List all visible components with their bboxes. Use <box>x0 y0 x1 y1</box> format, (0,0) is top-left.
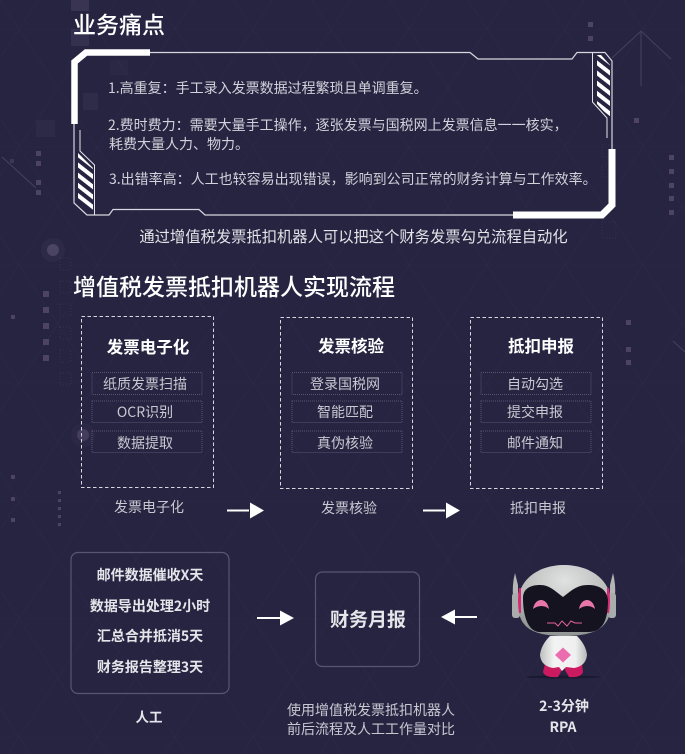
step: 真伪核验: 真伪核验 <box>317 433 373 453</box>
pain point 3: 3.出错率高：人工也较容易出现错误，影响到公司正常的财务计算与工作效率。 <box>109 169 597 189</box>
pink side trim <box>518 588 521 613</box>
panel title: 发票电子化 <box>107 334 190 358</box>
step: 数据提取 <box>92 431 202 453</box>
step: 真伪核验 <box>292 431 402 453</box>
manual item 3: 汇总合并抵消5天 <box>97 626 203 646</box>
panel: 财务月报 <box>316 572 420 666</box>
step: 数据提取: 数据提取 <box>117 433 173 453</box>
label: 发票核验: 发票核验 <box>321 498 377 518</box>
panel title: 发票核验 <box>318 333 384 357</box>
pain point 2: 2.费时费力：需要大量手工操作，逐张发票与国税网上发票信息一一核实， <box>108 115 568 135</box>
mouth <box>547 621 582 626</box>
pain point 1: 1.高重复：手工录入发票数据过程繁琐且单调重复。 <box>108 78 428 98</box>
manual item 1: 邮件数据催收X天 <box>97 565 203 585</box>
frame thick corner: bottom right <box>513 149 612 215</box>
step: 邮件通知: 邮件通知 <box>507 433 563 453</box>
step: 提交申报 <box>481 401 591 422</box>
frame thin outline <box>74 52 612 215</box>
pain point 2 continued: 耗费大量人力、物力。 <box>109 134 249 154</box>
step: OCR识别 <box>92 401 202 422</box>
step: OCR识别: OCR识别 <box>117 402 173 422</box>
heading: 实现流程: 增值税发票抵扣机器人实现流程 <box>73 268 395 302</box>
step: 智能匹配: 智能匹配 <box>317 402 373 422</box>
label: RPA: RPA <box>549 717 578 737</box>
eyes <box>533 600 549 609</box>
panel: 人工 <box>71 552 229 694</box>
step: 登录国税网: 登录国税网 <box>310 374 380 394</box>
panel: 发票电子化 <box>82 316 214 488</box>
chest emblem <box>555 648 571 662</box>
arrow: manual to report <box>257 610 294 626</box>
icon: robot <box>512 565 616 678</box>
caption: comparison: 前后流程及人工工作量对比 <box>287 719 455 739</box>
arrow: step 1 to 2 <box>227 502 264 518</box>
label: 抵扣申报: 抵扣申报 <box>510 498 566 518</box>
manual item 2: 数据导出处理2小时 <box>90 596 210 616</box>
panel: pain points frame <box>74 52 612 215</box>
step: 自动勾选 <box>481 372 591 394</box>
caption: comparison: 使用增值税发票抵扣机器人 <box>287 700 455 720</box>
panel: 财务月报: 财务月报 <box>330 605 406 632</box>
feet <box>543 664 562 677</box>
summary line: 通过增值税发票抵扣机器人可以把这个财务发票勾兑流程自动化 <box>139 225 568 247</box>
caption: comparison <box>287 700 455 739</box>
step: 提交申报: 提交申报 <box>507 402 563 422</box>
step: 邮件通知 <box>481 431 591 453</box>
step: 纸质发票扫描: 纸质发票扫描 <box>103 374 187 394</box>
heading: 业务痛点: 业务痛点 <box>73 6 165 40</box>
arms <box>541 641 550 657</box>
manual item 4: 财务报告整理3天 <box>97 657 203 677</box>
step: 纸质发票扫描 <box>92 372 202 394</box>
step: 登录国税网 <box>292 372 402 394</box>
arrow: RPA to report <box>441 610 477 624</box>
panel title: 抵扣申报 <box>508 333 574 357</box>
text block: pain points <box>108 78 597 189</box>
hatch: left <box>78 130 94 215</box>
panel: 发票核验 <box>280 318 412 488</box>
panel: 抵扣申报 <box>470 318 602 488</box>
step: 智能匹配 <box>292 401 402 422</box>
arrow: step 2 to 3 <box>423 502 460 518</box>
body <box>540 636 587 671</box>
step: 自动勾选: 自动勾选 <box>507 374 563 394</box>
label: 人工: 人工 <box>136 706 162 726</box>
hatch: right <box>592 52 610 138</box>
visor <box>523 585 608 632</box>
frame thick corner: top left <box>74 52 150 124</box>
label: 2-3分钟: 2-3分钟 <box>539 696 589 716</box>
head <box>518 565 611 636</box>
antenna ears <box>513 573 518 596</box>
label: 发票电子化: 发票电子化 <box>114 497 184 517</box>
